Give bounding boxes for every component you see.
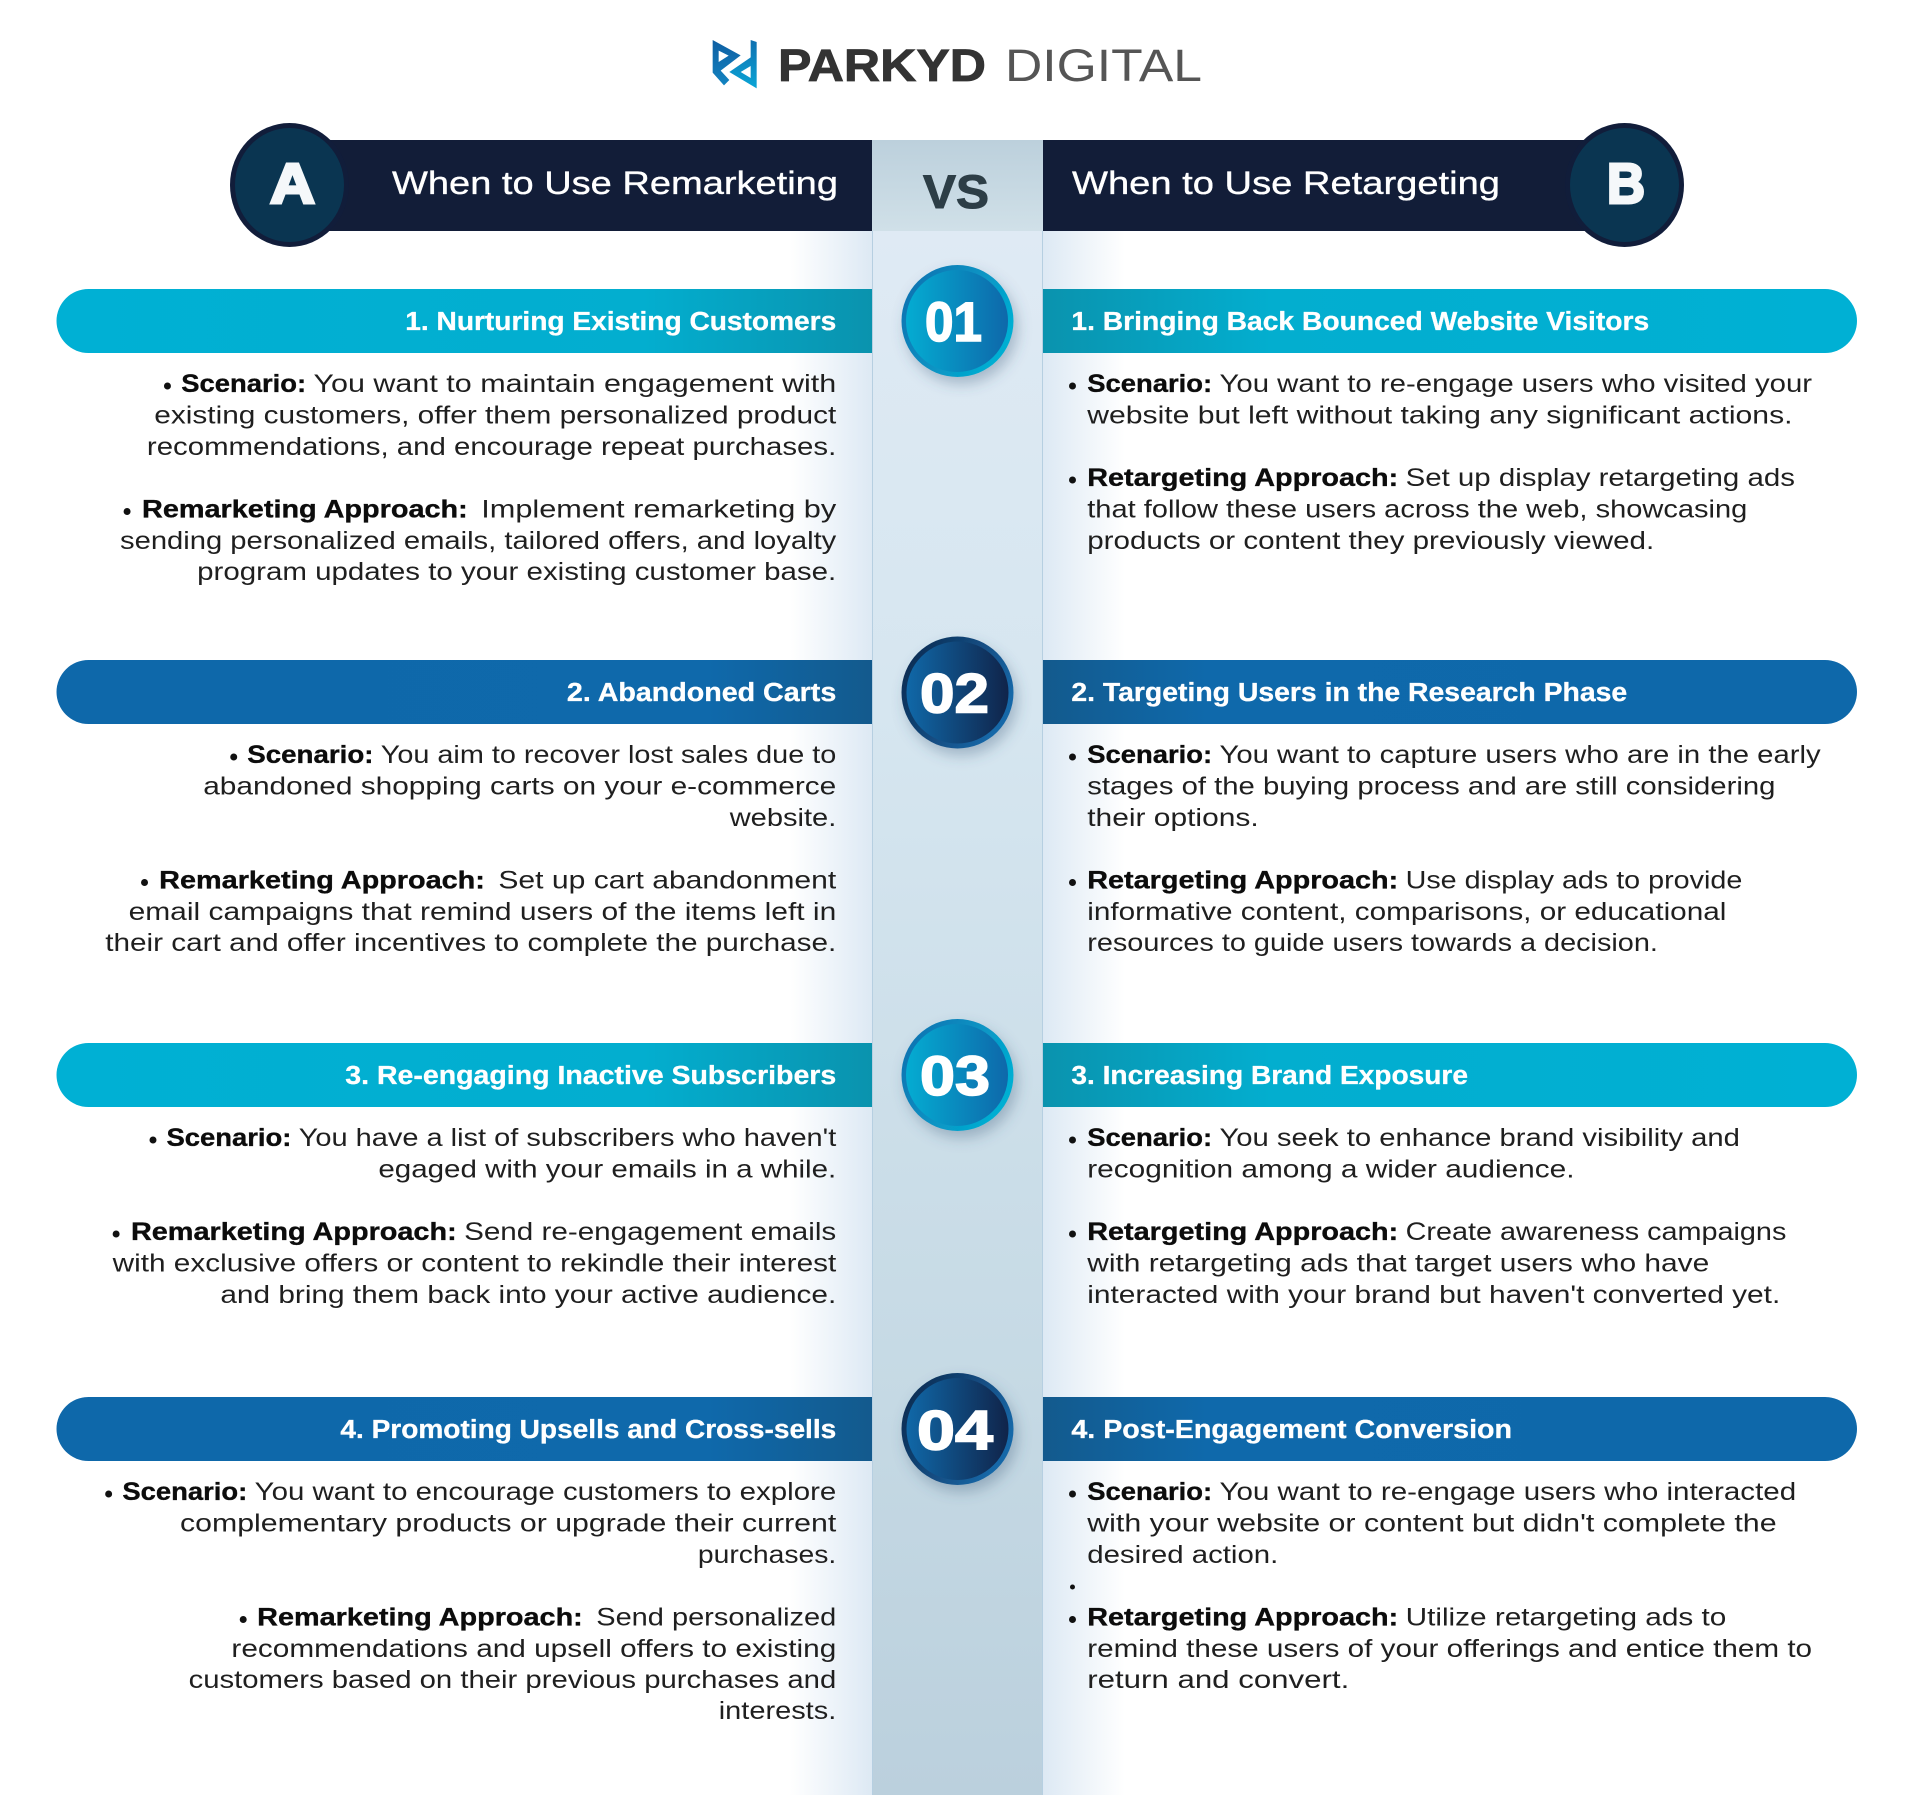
- panel: retargeting 1: You want to re-engage users who visited your: [1220, 370, 1812, 398]
- logo wordmark: DIGITAL: [1005, 40, 1202, 91]
- panel: retargeting 1: products or content they previously viewed.: [1087, 527, 1654, 555]
- panel: remarketing 4: interests.: [719, 1697, 836, 1725]
- icon: logo mark: [713, 40, 757, 88]
- header: when to use remarketing: A: [270, 152, 315, 216]
- number badge 02: [902, 636, 1014, 748]
- panel: retargeting 2: Scenario:: [1087, 741, 1212, 769]
- panel: retargeting 2: [1043, 660, 1857, 957]
- header: when to use remarketing: [230, 123, 872, 247]
- VS badge: VS: [923, 165, 989, 218]
- panel: retargeting 3: recognition among a wider audience.: [1087, 1155, 1575, 1184]
- panel: retargeting 3: [1043, 1043, 1857, 1309]
- panel: remarketing 1: program updates to your existing customer base.: [197, 558, 836, 586]
- panel: remarketing 1: [56, 289, 872, 586]
- panel: retargeting 3: 3. Increasing Brand Exposure: [1071, 1062, 1468, 1090]
- logo wordmark: [778, 40, 1202, 91]
- panel: remarketing 4: Scenario:: [122, 1478, 247, 1506]
- header: when to use remarketing: When to Use Remarketing: [392, 165, 838, 201]
- panel: remarketing 3: [56, 1043, 872, 1309]
- panel: retargeting 4: desired action.: [1087, 1541, 1278, 1569]
- header: when to use retargeting: When to Use Retargeting: [1072, 165, 1500, 201]
- logo: [713, 40, 1202, 91]
- panel: retargeting 4: 4. Post-Engagement Conversion: [1071, 1416, 1512, 1444]
- panel: remarketing 3: Send re-engagement emails: [464, 1218, 836, 1246]
- panel: remarketing 2: You aim to recover lost sales due to: [381, 741, 836, 769]
- number badge 01: 01: [925, 290, 982, 353]
- number badge 03: [902, 1019, 1014, 1131]
- panel: retargeting 4: You want to re-engage users who interacted: [1220, 1478, 1796, 1506]
- panel: remarketing 4: recommendations and upsell offers to existing: [231, 1635, 836, 1663]
- panel: remarketing 1: sending personalized emails, tailored offers, and loyalty: [120, 527, 837, 555]
- panel: remarketing 4: You want to encourage customers to explore: [255, 1478, 836, 1506]
- panel: retargeting 1: website but left without taking any significant actions.: [1086, 401, 1793, 430]
- number badge 04: 04: [917, 1398, 993, 1462]
- panel: remarketing 4: customers based on their previous purchases and: [189, 1666, 836, 1694]
- panel: remarketing 2: abandoned shopping carts on your e-commerce: [203, 772, 836, 801]
- number badge 02: 02: [920, 662, 989, 724]
- panel: retargeting 4: Retargeting Approach:: [1087, 1603, 1398, 1632]
- panel: retargeting 4: with your website or content but didn't complete the: [1086, 1509, 1777, 1538]
- center comparison column: [790, 231, 1125, 1795]
- panel: retargeting 2: You want to capture users who are in the early: [1220, 741, 1821, 769]
- panel: remarketing 4: [56, 1397, 872, 1725]
- panel: retargeting 1: 1. Bringing Back Bounced Website Visitors: [1071, 308, 1649, 336]
- panel: retargeting 2: their options.: [1087, 804, 1259, 832]
- panel: retargeting 4: Utilize retargeting ads to: [1406, 1603, 1726, 1632]
- panel: retargeting 3: You seek to enhance brand visibility and: [1220, 1124, 1740, 1152]
- panel: remarketing 2: Set up cart abandonment: [498, 866, 836, 895]
- panel: remarketing 4: Send personalized: [596, 1603, 836, 1632]
- panel: retargeting 4: remind these users of your offerings and entice them to: [1087, 1635, 1812, 1663]
- panel: retargeting 3: with retargeting ads that target users who have: [1086, 1249, 1709, 1278]
- panel: remarketing 3: with exclusive offers or content to rekindle their interest: [111, 1249, 836, 1278]
- panel: remarketing 1: recommendations, and encourage repeat purchases.: [147, 433, 836, 461]
- panel: remarketing 3: and bring them back into your active audience.: [220, 1281, 836, 1309]
- panel: remarketing 3: You have a list of subscribers who haven't: [299, 1124, 836, 1152]
- panel: remarketing 3: 3. Re-engaging Inactive Subscribers: [345, 1062, 836, 1090]
- panel: retargeting 2: Use display ads to provide: [1406, 866, 1742, 895]
- panel: remarketing 3: egaged with your emails in a while.: [378, 1155, 836, 1184]
- panel: retargeting 2: Retargeting Approach:: [1087, 866, 1398, 895]
- panel: retargeting 2: 2. Targeting Users in the Research Phase: [1071, 679, 1627, 707]
- number badge 04: [902, 1373, 1014, 1485]
- panel: retargeting 2: stages of the buying process and are still considering: [1087, 772, 1775, 801]
- panel: retargeting 1: that follow these users across the web, showcasing: [1087, 495, 1747, 524]
- panel: remarketing 4: complementary products or upgrade their current: [180, 1509, 836, 1538]
- logo wordmark: PARKYD: [778, 40, 986, 91]
- panel: retargeting 3: Create awareness campaigns: [1406, 1218, 1786, 1246]
- panel: remarketing 4: purchases.: [698, 1541, 836, 1569]
- header: when to use retargeting: [1043, 123, 1684, 247]
- panel: retargeting 1: [1043, 289, 1857, 555]
- panel: retargeting 3: Retargeting Approach:: [1087, 1218, 1398, 1246]
- panel: retargeting 3: interacted with your brand but haven't converted yet.: [1087, 1281, 1780, 1309]
- panel: remarketing 3: Remarketing Approach:: [131, 1218, 457, 1246]
- VS badge: [872, 140, 1043, 231]
- panel: retargeting 3: Scenario:: [1087, 1124, 1212, 1152]
- panel: remarketing 1: Implement remarketing by: [481, 495, 837, 524]
- header: when to use retargeting: B: [1607, 152, 1645, 216]
- panel: retargeting 2: resources to guide users towards a decision.: [1087, 929, 1658, 957]
- panel: retargeting 4: return and convert.: [1087, 1666, 1349, 1694]
- panel: retargeting 4: [1043, 1397, 1857, 1694]
- panel: remarketing 2: Scenario:: [247, 741, 373, 769]
- panel: remarketing 1: Remarketing Approach:: [142, 495, 468, 524]
- panel: remarketing 4: Remarketing Approach:: [257, 1603, 583, 1632]
- panel: remarketing 2: website.: [729, 804, 836, 832]
- panel: remarketing 2: [56, 660, 872, 957]
- panel: retargeting 1: Set up display retargeting ads: [1406, 464, 1795, 492]
- panel: remarketing 2: Remarketing Approach:: [159, 866, 485, 895]
- panel: remarketing 1: existing customers, offer them personalized product: [154, 401, 836, 430]
- number badge 01: [902, 265, 1014, 377]
- panel: remarketing 4: 4. Promoting Upsells and Cross-sells: [340, 1416, 836, 1444]
- panel: remarketing 2: 2. Abandoned Carts: [567, 679, 836, 707]
- panel: retargeting 1: Retargeting Approach:: [1087, 464, 1398, 492]
- panel: remarketing 1: 1. Nurturing Existing Customers: [405, 308, 836, 336]
- panel: retargeting 1: Scenario:: [1087, 370, 1212, 398]
- panel: retargeting 4: Scenario:: [1087, 1478, 1212, 1506]
- panel: remarketing 1: You want to maintain engagement with: [313, 370, 836, 398]
- panel: remarketing 2: their cart and offer incentives to complete the purchase.: [105, 929, 836, 957]
- panel: retargeting 2: informative content, comparisons, or educational: [1087, 898, 1726, 926]
- number badge 03: 03: [920, 1044, 990, 1107]
- panel: remarketing 2: email campaigns that remind users of the items left in: [129, 898, 836, 926]
- panel: remarketing 1: Scenario:: [181, 370, 306, 398]
- panel: remarketing 3: Scenario:: [166, 1124, 291, 1152]
